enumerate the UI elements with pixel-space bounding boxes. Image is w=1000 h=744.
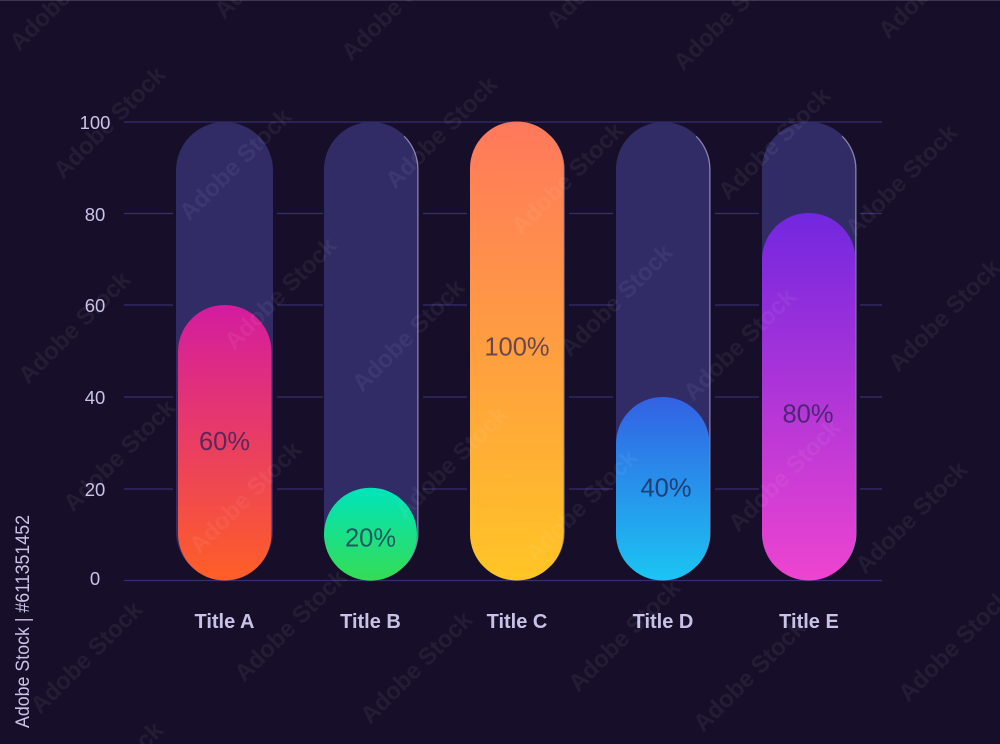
x axis titles: Title C [487, 611, 547, 633]
watermark pattern: Adobe Stock [58, 394, 182, 517]
y axis labels: 60 [85, 295, 105, 316]
watermark pattern: Adobe Stock [184, 436, 308, 559]
watermark pattern: Adobe Stock [347, 274, 471, 397]
watermark pattern: Adobe Stock [688, 614, 812, 737]
watermark pattern: Adobe Stock [13, 266, 137, 389]
x axis titles: Title E [779, 611, 839, 633]
bar: Title C: 100% [484, 334, 550, 362]
bar: Title D: 40% [640, 474, 692, 502]
watermark pattern: Adobe Stock [713, 82, 837, 205]
bar: Title C [470, 122, 564, 580]
watermark pattern: Adobe Stock [678, 283, 802, 406]
bar: Title A: 60% [199, 428, 250, 456]
watermark pattern: Adobe Stock [219, 232, 343, 355]
x axis titles: Title B [340, 611, 401, 633]
watermark pattern: Adobe Stock [506, 117, 630, 240]
watermark pattern: Adobe Stock [390, 401, 514, 524]
watermark pattern: Adobe Stock [840, 119, 964, 242]
x axis titles: Title A [194, 611, 255, 633]
y axis labels [80, 112, 110, 589]
watermark pattern: Adobe Stock [850, 456, 974, 579]
watermark pattern: Adobe Stock [229, 564, 353, 687]
side stock id label: Adobe Stock | #611351452 [13, 515, 34, 728]
top edge line [0, 0, 1000, 1]
watermark pattern: Adobe Stock [355, 606, 479, 729]
y axis labels: 20 [85, 479, 105, 500]
watermark pattern: Adobe Stock [555, 239, 679, 362]
y axis labels: 0 [90, 568, 100, 589]
bar: Title E [762, 122, 856, 580]
y axis labels: 40 [85, 387, 105, 408]
watermark pattern: Adobe Stock [723, 414, 847, 537]
watermark pattern: Adobe Stock [380, 71, 504, 194]
y axis labels: 80 [85, 204, 105, 225]
bar: Title B: 20% [345, 524, 396, 552]
bar: Title D [616, 122, 710, 580]
watermark pattern: Adobe Stock [48, 61, 172, 184]
x axis titles: Title D [633, 611, 693, 633]
watermark pattern: Adobe Stock [25, 596, 149, 719]
watermark pattern: Adobe Stock [174, 103, 298, 226]
watermark pattern: Adobe Stock [563, 574, 687, 697]
grid lines [124, 122, 882, 580]
y axis labels: 100 [80, 112, 110, 133]
bar: Title A [176, 122, 273, 580]
bar: Title E: 80% [782, 400, 834, 428]
bar: Title B [324, 122, 418, 581]
watermark pattern: Adobe Stock [520, 444, 644, 567]
x axis titles [194, 611, 839, 633]
